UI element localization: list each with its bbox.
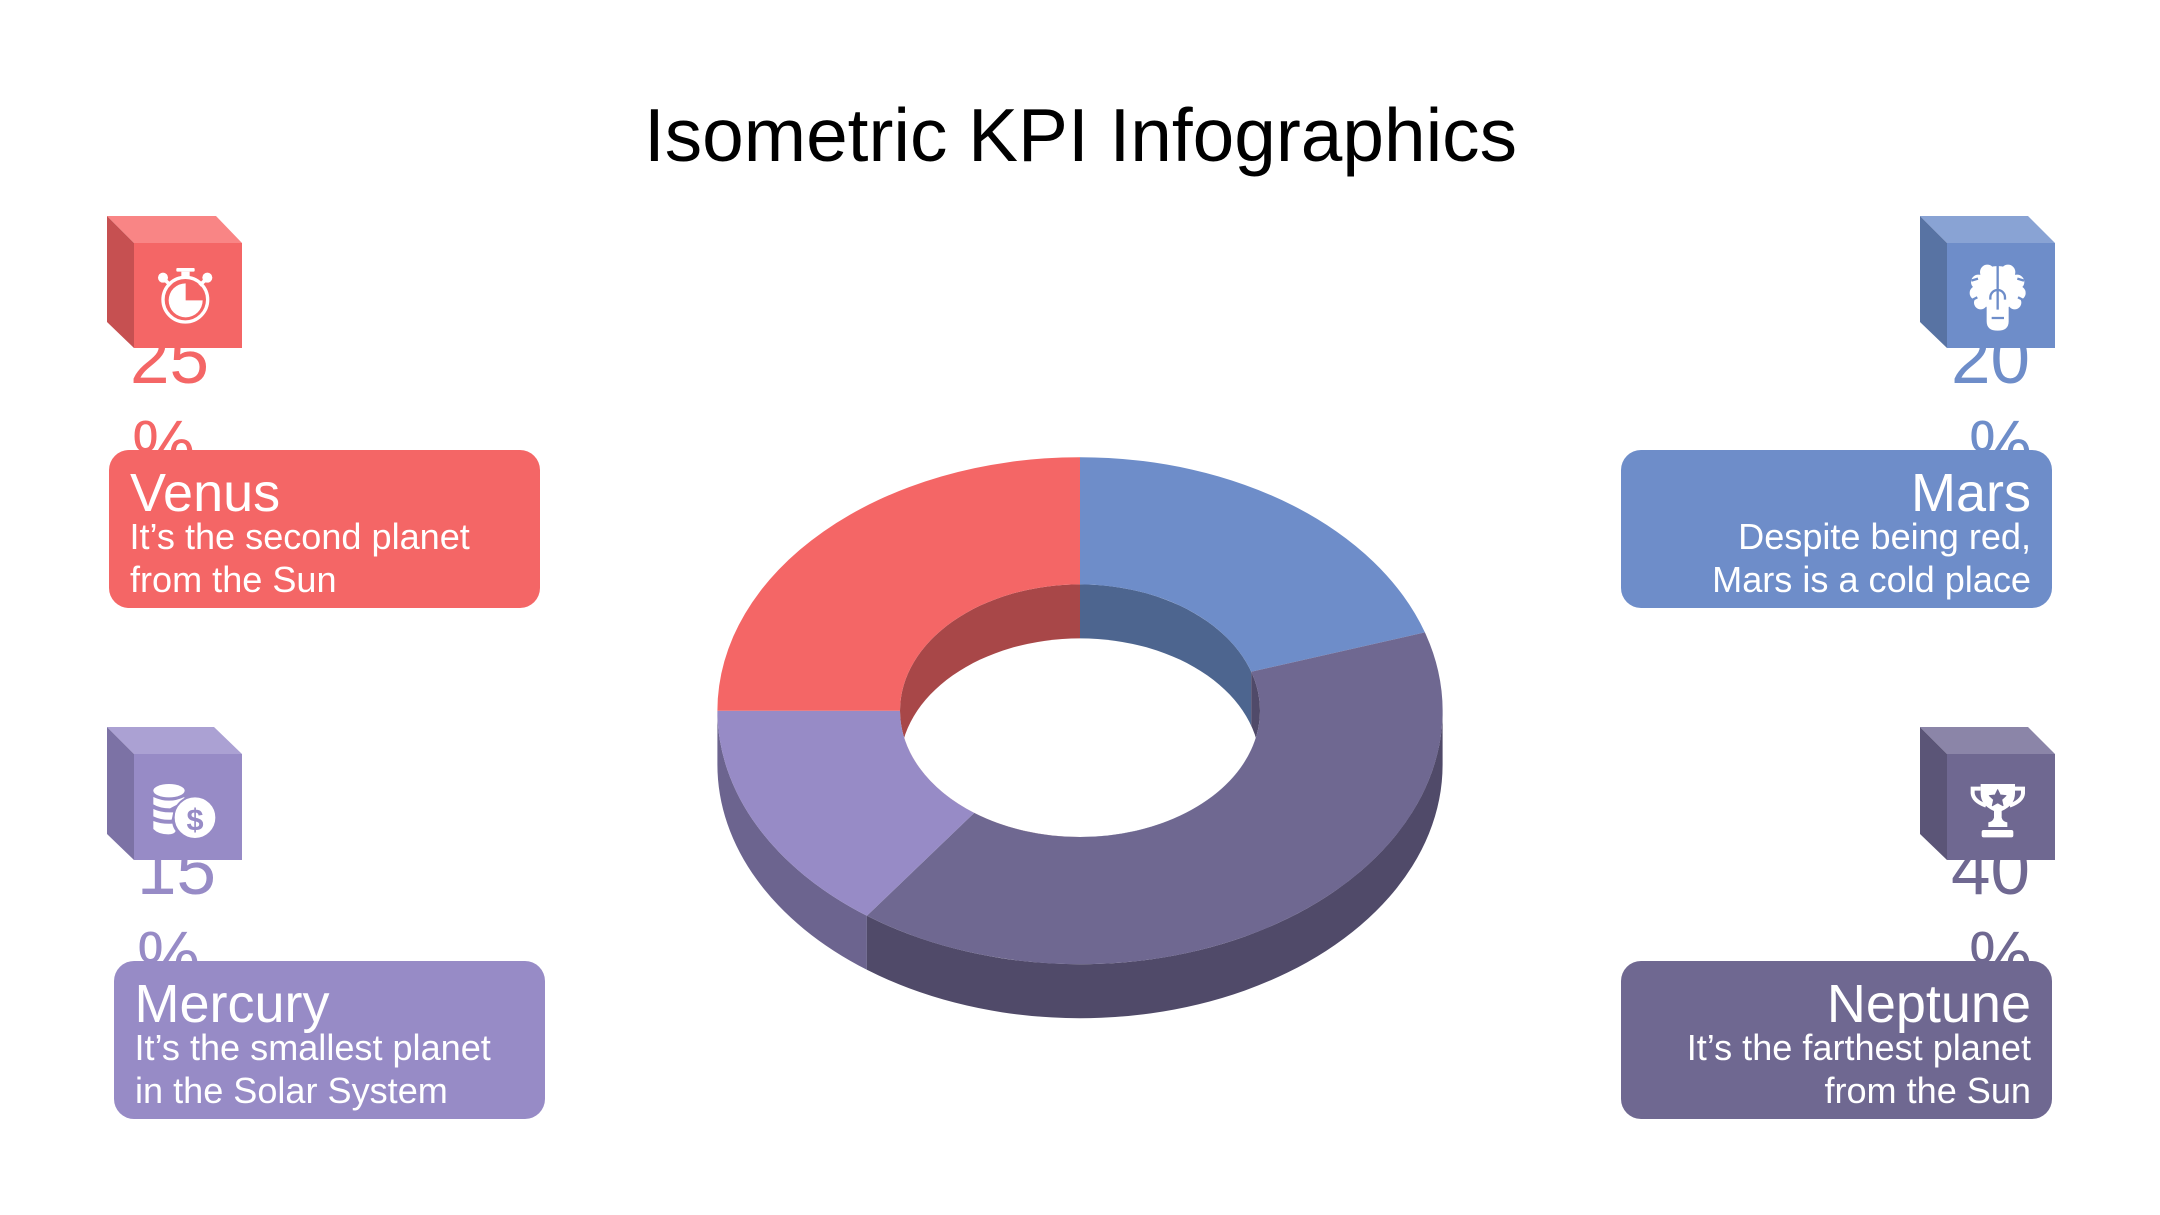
chart: 3D donut [717,457,1443,1018]
icon: stopwatch [158,268,212,322]
panel: Neptune [1621,727,2055,1119]
Mercury description: It’s the smallest planet [134,1027,491,1068]
Mars percentage: % [1969,407,2032,486]
Mercury heading: Mercury [134,974,330,1034]
Mercury card [114,961,545,1119]
slice: Mercury 15% [717,711,974,916]
Mars cube [1920,216,2055,348]
donut outer side: Mercury [717,711,867,970]
title: Isometric KPI Infographics [644,93,1517,177]
panel: Mercury [107,727,545,1119]
Neptune percentage: % [1969,918,2032,997]
Neptune cube [1920,727,2055,860]
Mars description: Despite being red, [1738,516,2031,557]
Mercury percentage: 15 [137,831,216,910]
slice: Mars 20% [1080,457,1425,672]
Venus description: It’s the second planet [130,516,470,557]
Mercury cube [107,727,242,860]
icon: coins [153,784,216,839]
Neptune description: from the Sun [1824,1070,2031,1111]
Neptune percentage: 40 [1951,831,2030,910]
Venus heading: Venus [130,463,280,523]
icon: brain bulb [1970,264,2026,331]
Mars heading: Mars [1911,463,2031,523]
Venus percentage: % [132,407,195,486]
icon: coins: $ [186,803,204,837]
donut inner wall [900,584,1260,837]
Neptune heading: Neptune [1827,974,2031,1034]
Neptune description: It’s the farthest planet [1687,1027,2031,1068]
slice: Venus 25% [717,457,1080,711]
Mars card [1621,450,2052,608]
Venus description: from the Sun [130,559,337,600]
panel: Mars [1621,216,2055,608]
donut outer side: Neptune [867,711,1443,1018]
Mars description: Mars is a cold place [1712,559,2031,600]
Venus percentage: 25 [130,320,209,399]
Venus card [109,450,540,608]
icon: trophy [1973,784,2023,837]
panel: Venus [107,216,540,608]
Mars percentage: 20 [1951,320,2030,399]
Neptune card [1621,961,2052,1119]
slice: Neptune 40% [867,632,1443,964]
Venus cube [107,216,242,348]
Mercury percentage: % [137,918,200,997]
Mercury description: in the Solar System [135,1070,448,1111]
